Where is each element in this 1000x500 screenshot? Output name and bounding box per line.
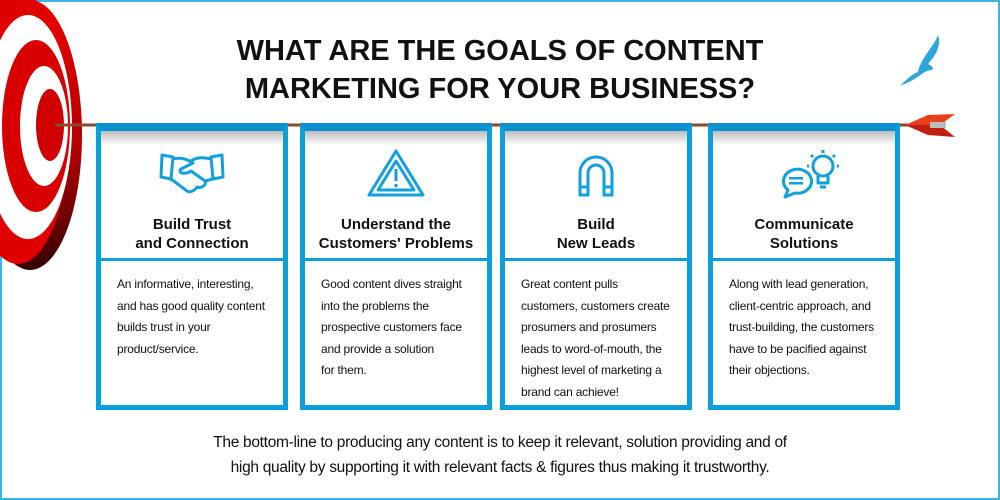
target [0, 0, 82, 270]
footer text: high quality by supporting it with relevant facts & figures thus making it trustworthy. [231, 459, 769, 476]
heading: Understand the [341, 216, 451, 233]
title: WHAT ARE THE GOALS OF CONTENT [237, 35, 763, 67]
text: brand can achieve! [521, 384, 619, 398]
text: have to be pacified against [729, 342, 866, 356]
heading [319, 216, 473, 252]
heading: Build Trust [153, 216, 231, 233]
icon: bird [900, 35, 940, 86]
text: client-centric approach, and [729, 298, 871, 312]
text: for them. [321, 363, 367, 377]
text: product/service. [117, 342, 199, 356]
icon: warning [368, 149, 425, 196]
text: An informative, interesting, [117, 277, 253, 291]
text: Great content pulls [521, 277, 618, 291]
text: their objections. [729, 363, 810, 377]
text [729, 277, 874, 377]
text [117, 277, 265, 356]
text: into the problems the [321, 298, 429, 312]
heading: New Leads [557, 235, 635, 252]
heading [754, 216, 854, 252]
heading [135, 216, 249, 252]
panel: solutions [708, 123, 900, 410]
text: and provide a solution [321, 342, 434, 356]
heading [557, 216, 635, 252]
text: prosumers and prosumers [521, 320, 656, 334]
icon: chat and bulb [782, 150, 839, 198]
text [321, 277, 462, 377]
text: and has good quality content [117, 298, 265, 312]
footer text: The bottom-line to producing any content is to keep it relevant, solution providing and of [213, 434, 787, 451]
heading: Customers' Problems [319, 235, 473, 252]
heading: and Connection [135, 235, 249, 252]
panel: leads [500, 123, 692, 410]
text: Along with lead generation, [729, 277, 868, 291]
heading: Communicate [754, 216, 854, 233]
text [521, 277, 670, 398]
heading: Solutions [770, 235, 838, 252]
title [236, 35, 764, 105]
footer text [213, 434, 788, 476]
panel: problems [300, 123, 492, 410]
panel: build trust [96, 123, 288, 410]
text: customers, customers create [521, 298, 670, 312]
text: leads to word-of-mouth, the [521, 342, 662, 356]
heading: Build [577, 216, 615, 233]
text: prospective customers face [321, 320, 462, 334]
icon: handshake [160, 154, 224, 194]
icon: magnet [578, 156, 614, 196]
text: trust-building, the customers [729, 320, 874, 334]
text: Good content dives straight [321, 277, 462, 291]
text: highest level of marketing a [521, 363, 661, 377]
arrow [55, 114, 955, 137]
title: MARKETING FOR YOUR BUSINESS? [245, 73, 755, 105]
text: builds trust in your [117, 320, 210, 334]
